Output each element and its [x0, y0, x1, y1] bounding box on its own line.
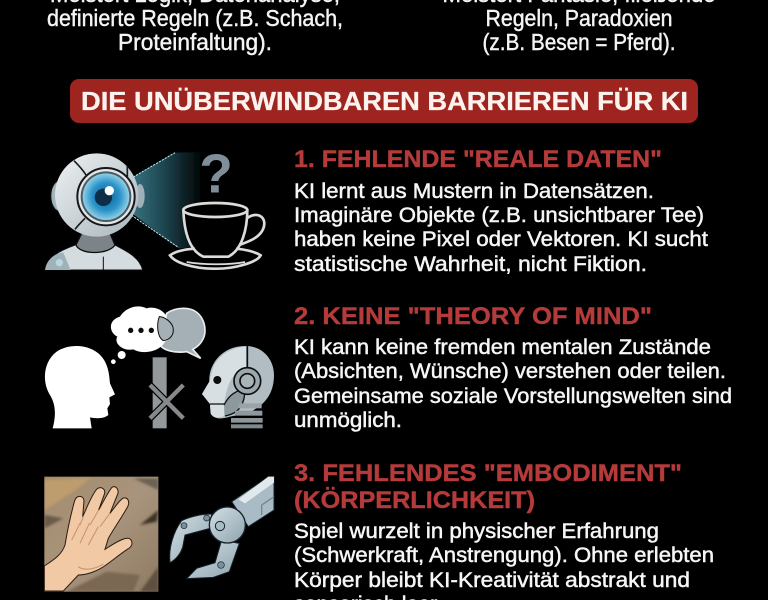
thought dots: [118, 351, 126, 359]
text block: KI column: definierte Regeln (z.B. Schach,: [47, 5, 343, 31]
heading: barrier 1: 1. FEHLENDE "REALE DATEN": [294, 146, 662, 173]
text block: barrier 3: (Schwerkraft, Anstrengung). Ohne erlebten: [294, 543, 714, 567]
robot eye: [77, 168, 135, 225]
robot head: [55, 153, 138, 237]
text block: barrier 2: (Absichten, Wünsche) verstehen oder teilen.: [294, 359, 726, 383]
text block: barrier 2: [294, 335, 732, 432]
wrist joint: [209, 507, 245, 543]
robot ear ring: [234, 368, 261, 394]
text block: barrier 1: statistische Wahrheit, nicht Fiktion.: [294, 252, 647, 276]
lower finger: [187, 540, 239, 579]
text block: barrier 3: Körper bleibt KI-Kreativität abstrakt und: [294, 568, 690, 592]
text block: barrier 2: unmöglich.: [294, 408, 402, 432]
heading: barrier 3: (KÖRPERLICHKEIT): [294, 487, 535, 514]
text block: barrier 3: [294, 519, 714, 600]
saucer: [170, 249, 261, 269]
light beam: [110, 152, 203, 248]
text block: barrier 1: [294, 179, 708, 276]
text block: barrier 1: Imaginäre Objekte (z.B. unsichtbarer Tee): [294, 203, 704, 227]
robot neck ribs: [238, 403, 262, 408]
banner heading: DIE UNÜBERWINDBAREN BARRIEREN FÜR KI: [81, 86, 688, 116]
banner heading: [70, 79, 698, 123]
robot shoulders: [45, 245, 143, 270]
upper finger: [170, 514, 212, 563]
text block: barrier 1: haben keine Pixel oder Vektoren. KI sucht: [294, 227, 708, 251]
thought cloud: [111, 306, 172, 352]
tea cup: [183, 209, 247, 257]
text block: Kind column: [442, 0, 716, 55]
text block: barrier 1: KI lernt aus Mustern in Datensätzen.: [294, 179, 654, 203]
robot ear: [51, 181, 68, 211]
heading: barrier 2: 2. KEINE "THEORY OF MIND": [294, 303, 652, 330]
icon: robot looking at invisible tea: [45, 143, 264, 270]
text block: KI column: [47, 0, 343, 55]
hand: [44, 487, 132, 591]
arm: [232, 477, 274, 527]
text block: Kind column: Regeln, Paradoxien: [486, 5, 672, 31]
text block: barrier 3: Spiel wurzelt in physischer Erfahrung: [294, 519, 659, 543]
text block: Kind column: (z.B. Besen = Pferd).: [482, 29, 676, 55]
heading: barrier 3: 3. FEHLENDES "EMBODIMENT": [294, 460, 682, 487]
text block: KI column: Proteinfaltung).: [118, 29, 272, 55]
icon: robot gripper: [170, 477, 274, 579]
icon: human and robot mind gap: [45, 306, 274, 428]
icon: hand on sand: [44, 477, 158, 592]
text block: barrier 2: Gemeinsame soziale Vorstellungswelten sind: [294, 384, 732, 408]
heading: barrier 3: [294, 460, 682, 514]
robot head profile: [202, 346, 274, 418]
human head silhouette: [45, 346, 115, 428]
question mark: ?: [199, 143, 233, 205]
speech bubble: [160, 308, 205, 358]
sand texture: [44, 478, 158, 592]
barrier with cross: [150, 357, 183, 428]
text block: barrier 2: KI kann keine fremden mentalen Zustände: [294, 335, 711, 359]
